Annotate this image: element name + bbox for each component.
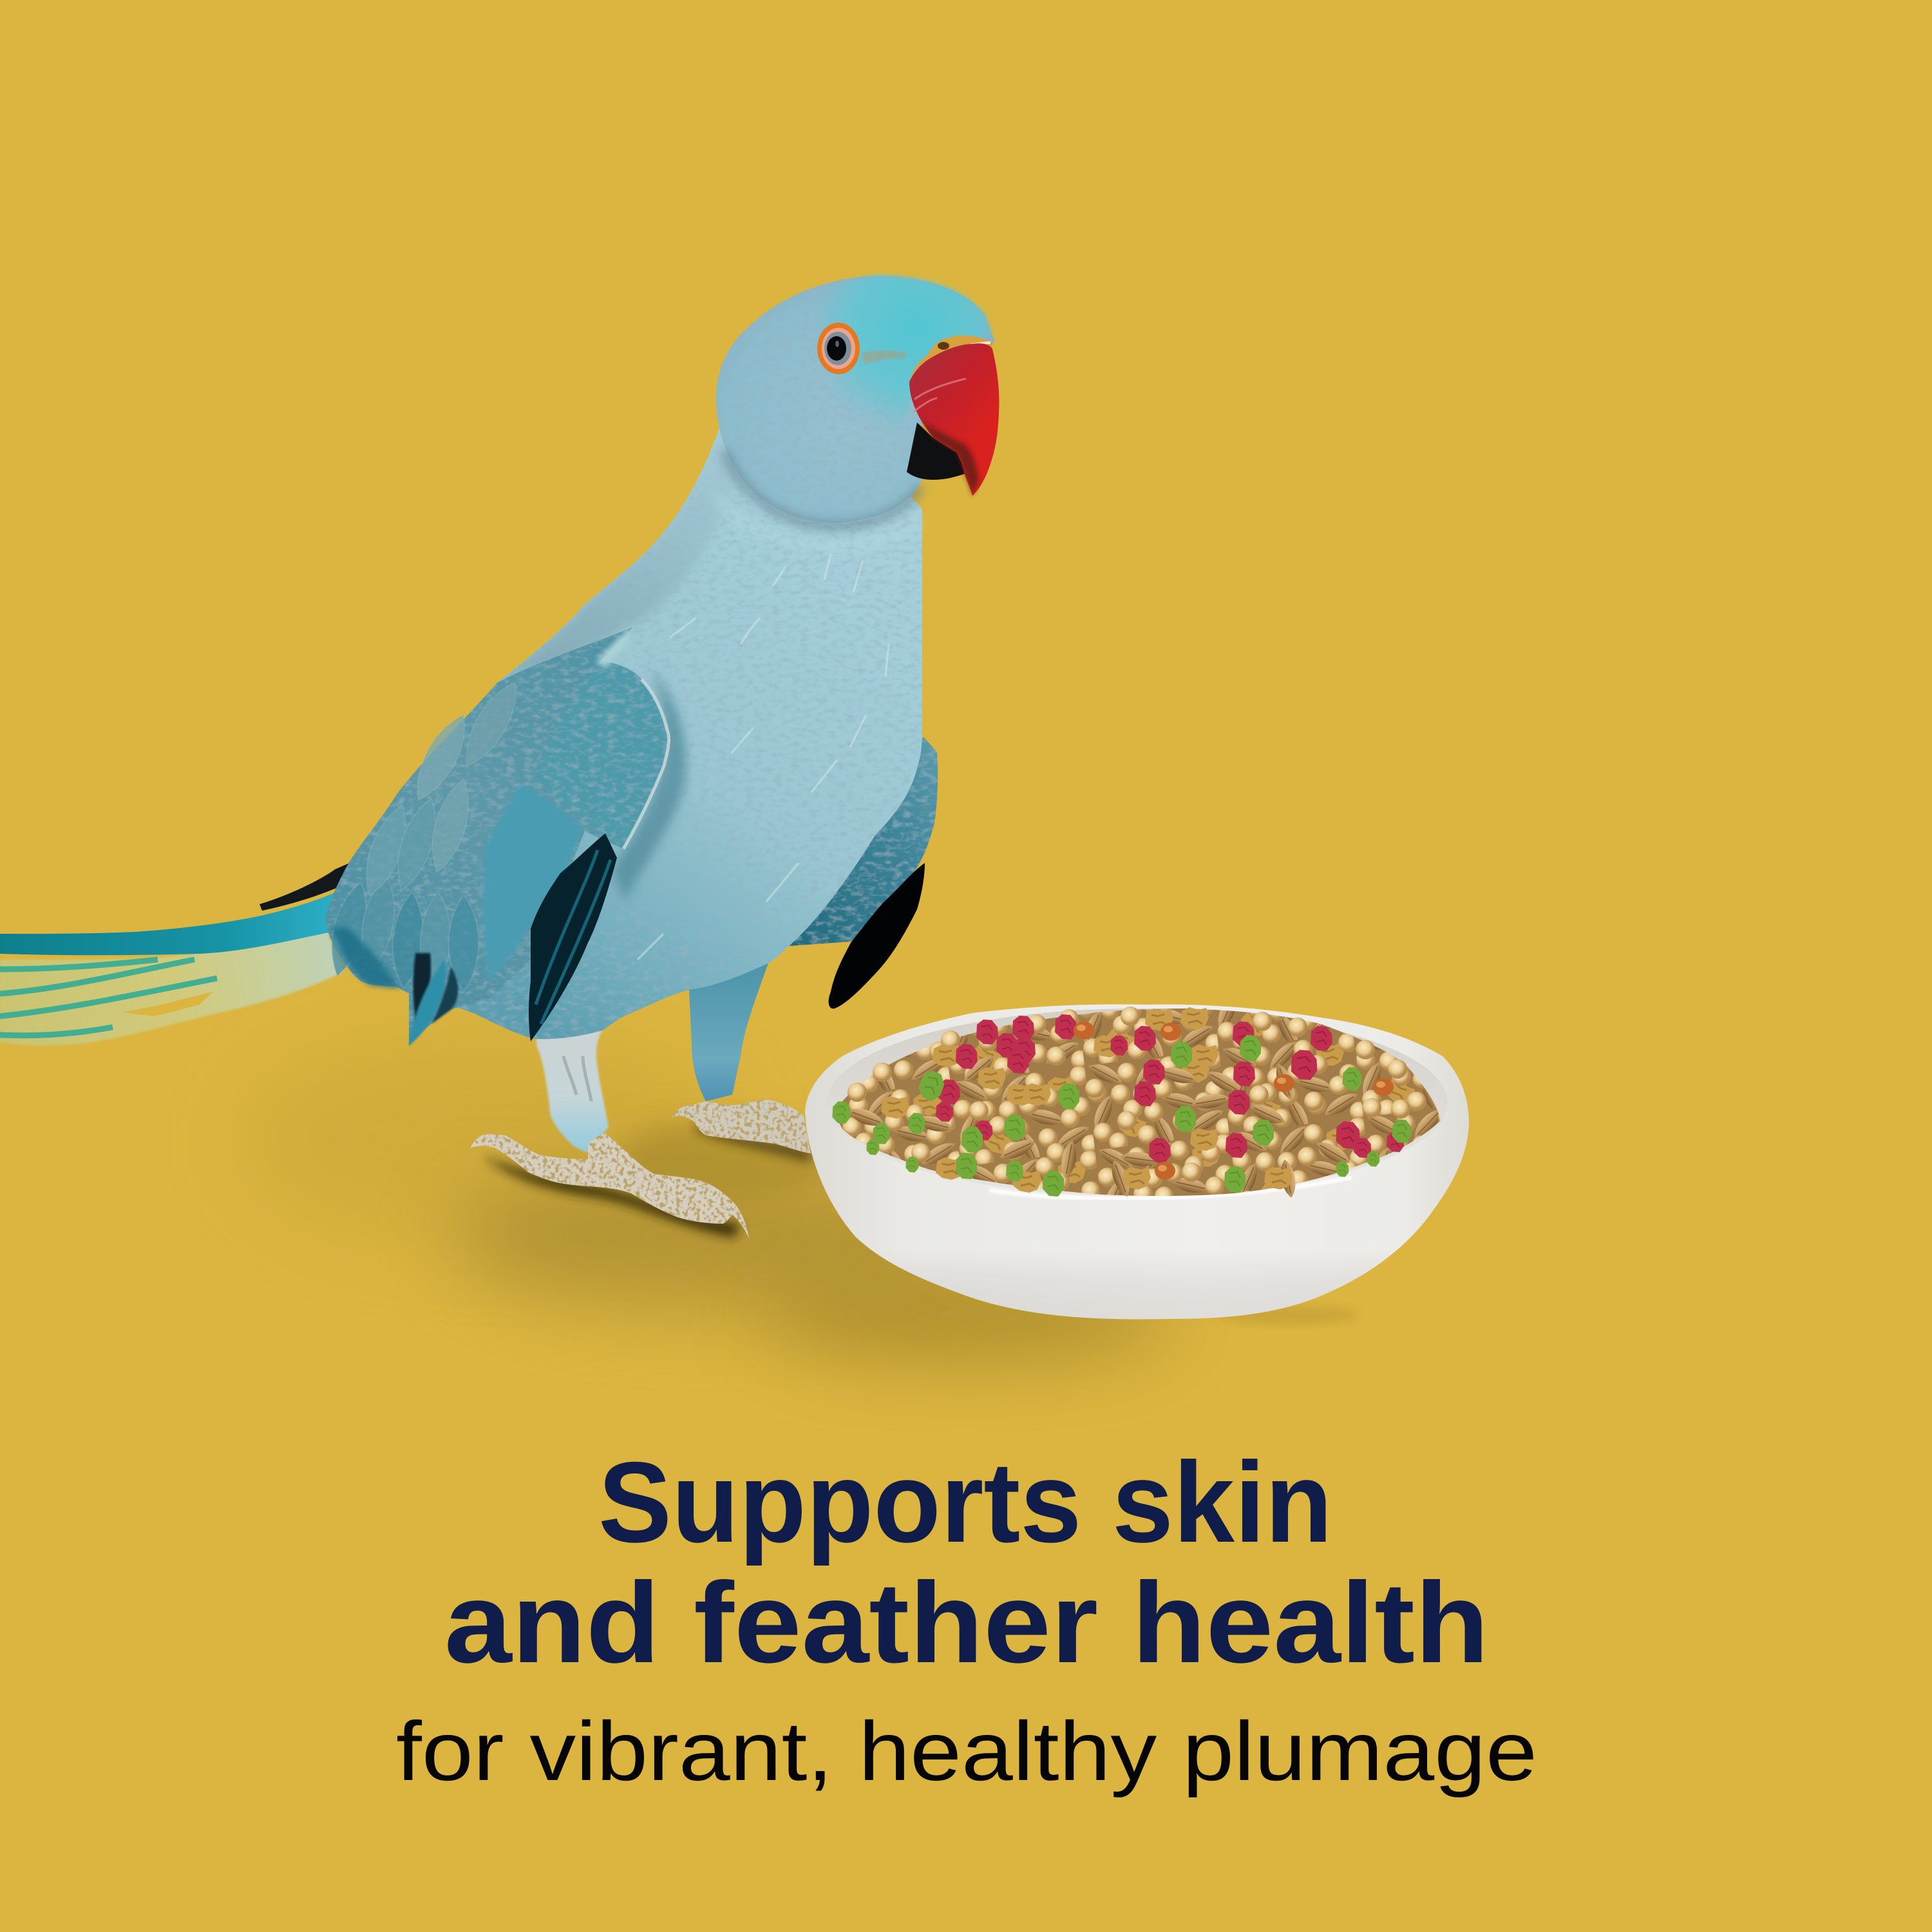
subheading: for vibrant, healthy plumage (396, 1704, 1537, 1798)
neck light band (715, 496, 920, 546)
facial skin (862, 351, 908, 365)
beak lower shade (922, 422, 979, 496)
far leg and foot (672, 960, 811, 1153)
wing light patch (484, 784, 583, 981)
cere and nostril (909, 336, 992, 384)
headline: and feather health (444, 1558, 1489, 1687)
wing dark tips (332, 927, 399, 989)
shoulder feathers (535, 661, 669, 849)
head crown turquoise (818, 276, 992, 435)
bowl inner (827, 1009, 1448, 1197)
upper back shading (506, 430, 729, 677)
chin black (907, 422, 966, 480)
headline: Supports skin (598, 1438, 1332, 1566)
breast feather strands (638, 554, 889, 960)
parrot (0, 276, 999, 1238)
wing covert feathers (323, 675, 528, 992)
orange seeds (1160, 1023, 1181, 1041)
wing primary feathers black (529, 833, 617, 1041)
food bowl (805, 1005, 1469, 1320)
green pellets (1171, 1041, 1192, 1068)
near wing (323, 627, 669, 1046)
head (715, 276, 999, 546)
seed pile (833, 1009, 1441, 1196)
body (335, 419, 922, 1039)
near leg (536, 1028, 609, 1153)
eye (817, 323, 860, 374)
tail feathers (0, 858, 361, 1046)
edge seeds (848, 1083, 867, 1102)
bowl body (805, 1005, 1469, 1320)
near foot (470, 1133, 749, 1238)
ground shadows (245, 1037, 1359, 1359)
seed mix (832, 1007, 1441, 1199)
red pellets (976, 1019, 998, 1045)
rim highlight (990, 1177, 1352, 1198)
far wing (789, 737, 938, 1009)
wing-side body shadow (612, 670, 687, 902)
beak (909, 343, 999, 496)
neck ring shadow (724, 451, 921, 526)
far wing tip (829, 863, 925, 1009)
